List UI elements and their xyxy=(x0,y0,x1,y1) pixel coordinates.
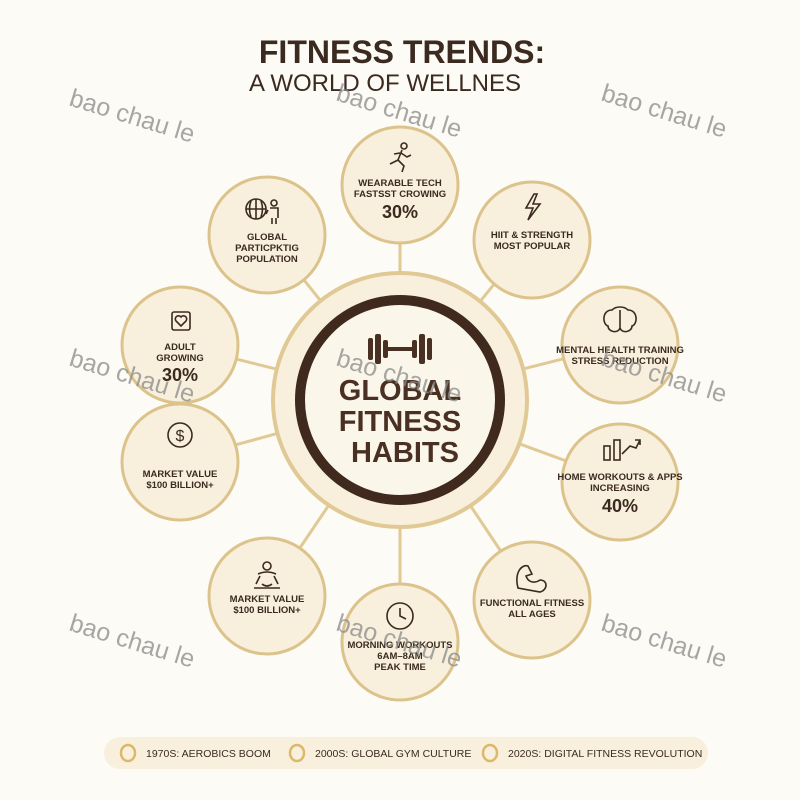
node texts: POPULATION xyxy=(236,254,298,265)
node texts: HOME WORKOUTS & APPS xyxy=(557,472,683,483)
central hub: FITNESS xyxy=(339,406,461,438)
watermarks: bao chau le xyxy=(598,344,730,409)
legend bar: 2020S: DIGITAL FITNESS REVOLUTION xyxy=(508,748,702,760)
watermarks: bao chau le xyxy=(66,344,198,409)
node texts: MOST POPULAR xyxy=(494,241,570,252)
icon: chart up xyxy=(604,440,640,460)
node: home workouts xyxy=(562,424,678,540)
node texts: PARTICPKTIG xyxy=(235,243,299,254)
icon: lightning xyxy=(526,194,540,220)
watermarks: bao chau le xyxy=(333,344,465,409)
watermarks: bao chau le xyxy=(333,609,465,674)
watermarks: bao chau le xyxy=(598,609,730,674)
node: market value 2 xyxy=(209,538,325,654)
node: wearable tech xyxy=(342,127,458,243)
icon: brain xyxy=(604,307,636,332)
node texts: PEAK TIME xyxy=(374,662,426,673)
node texts: ALL AGES xyxy=(508,609,556,620)
node: market value xyxy=(122,404,238,520)
node texts: FASTSST CROWING xyxy=(354,189,446,200)
node: hiit xyxy=(474,182,590,298)
icon: dollar xyxy=(168,423,192,447)
connectors xyxy=(180,185,618,640)
legend bar xyxy=(104,737,708,769)
node texts: ADULT xyxy=(164,342,196,353)
node texts: WEARABLE TECH xyxy=(358,178,442,189)
node texts: FUNCTIONAL FITNESS xyxy=(480,598,584,609)
node: adult growing xyxy=(122,287,238,403)
node texts: MARKET VALUE xyxy=(143,469,217,480)
node texts xyxy=(143,178,684,673)
legend bar: 1970S: AEROBICS BOOM xyxy=(146,748,271,760)
icon: globe and person xyxy=(246,199,278,224)
watermarks xyxy=(66,79,730,674)
title: FITNESS TRENDS: xyxy=(259,34,545,70)
node texts: $100 BILLION+ xyxy=(146,480,214,491)
node texts: 40% xyxy=(602,496,638,516)
icon: meditation xyxy=(254,562,280,588)
central hub xyxy=(273,273,527,527)
node texts: STRESS REDUCTION xyxy=(571,356,669,367)
node texts: GLOBAL xyxy=(247,232,287,243)
node: functional fitness xyxy=(474,542,590,658)
central hub: HABITS xyxy=(351,437,459,469)
node texts: MORNING WORKOUTS xyxy=(347,640,453,651)
node texts: 30% xyxy=(382,202,418,222)
node texts: MENTAL HEALTH TRAINING xyxy=(556,345,684,356)
legend bar: 2000S: GLOBAL GYM CULTURE xyxy=(315,748,471,760)
icon: dumbbell xyxy=(368,334,432,364)
watermarks: bao chau le xyxy=(66,84,198,149)
watermarks: bao chau le xyxy=(66,609,198,674)
watermarks: bao chau le xyxy=(598,79,730,144)
icon: clock xyxy=(387,603,413,629)
node texts: HIIT & STRENGTH xyxy=(491,230,573,241)
node: global participation xyxy=(209,177,325,293)
icon: heart box xyxy=(172,312,190,330)
node texts: $100 BILLION+ xyxy=(233,605,301,616)
central hub: GLOBAL xyxy=(339,375,461,407)
icon: muscle arm xyxy=(517,566,546,592)
icon: runner xyxy=(390,143,411,172)
node texts: 6AM–8AM xyxy=(377,651,423,662)
node texts: GROWING xyxy=(156,353,204,364)
icons xyxy=(168,143,640,629)
watermarks: bao chau le xyxy=(333,79,465,144)
node texts: MARKET VALUE xyxy=(230,594,304,605)
icon: dollar: $ xyxy=(176,428,185,445)
node texts: 30% xyxy=(162,365,198,385)
node texts: INCREASING xyxy=(590,483,650,494)
node: mental health xyxy=(562,287,678,403)
title: A WORLD OF WELLNES xyxy=(249,70,521,97)
title xyxy=(249,34,545,97)
node: morning workouts xyxy=(342,584,458,700)
